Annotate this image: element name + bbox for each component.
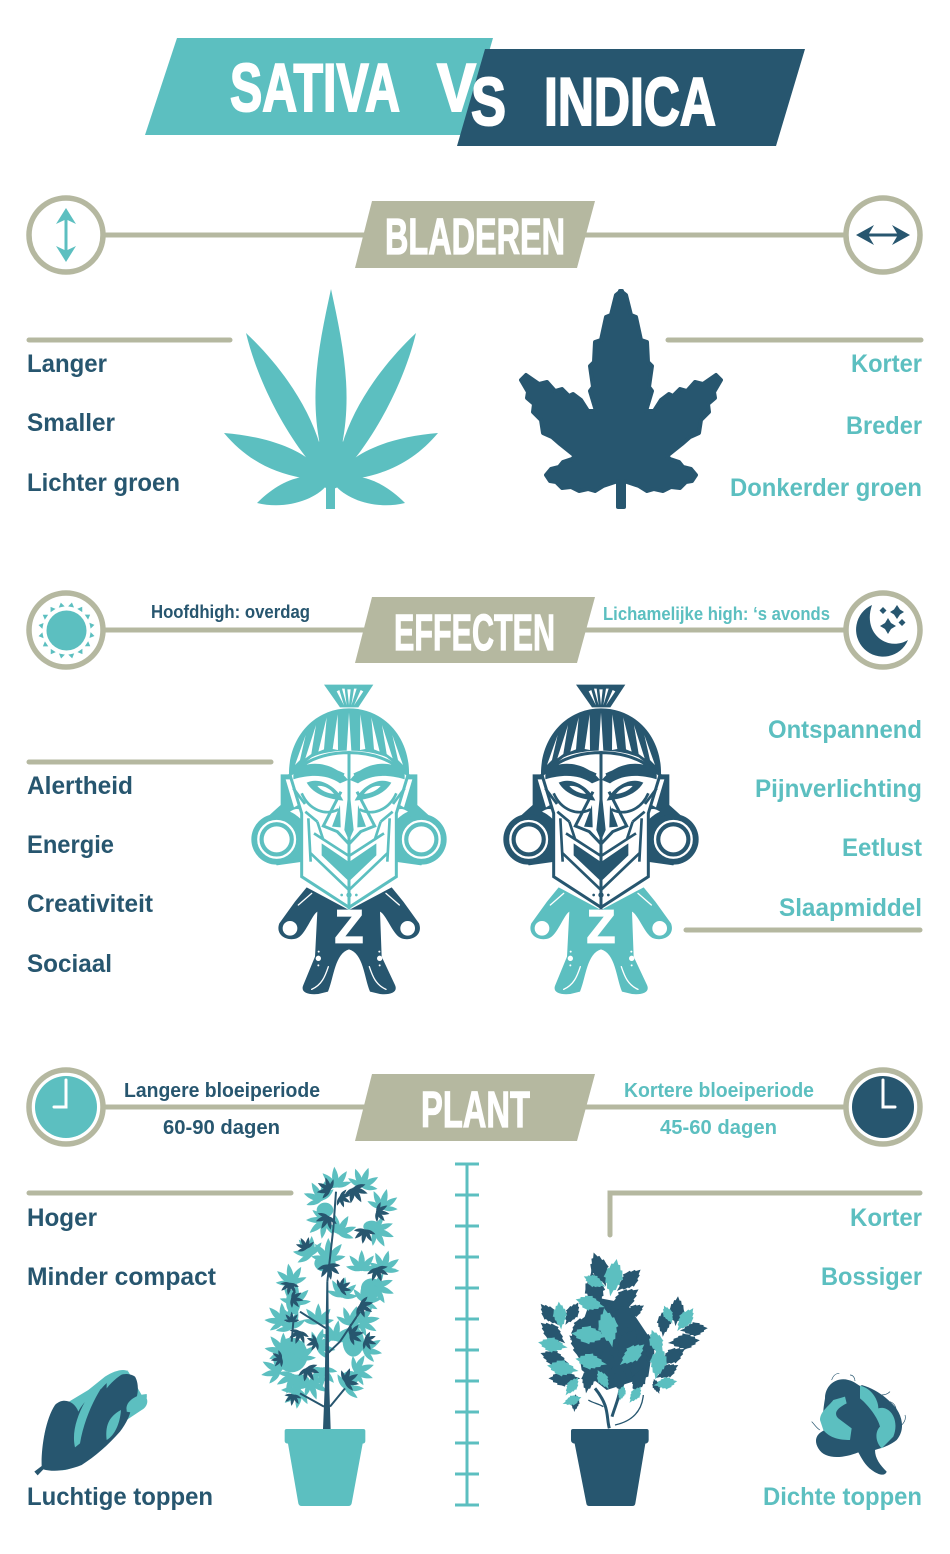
indica mask figure: Z (587, 901, 615, 953)
luchtige toppen label: Luchtige toppen (27, 1483, 213, 1511)
section heading: PLANT: PLANT (421, 1081, 530, 1138)
indica plant illustration (535, 1249, 708, 1506)
sativa leaf traits (27, 350, 180, 497)
icon: airy bud (34, 1370, 147, 1475)
heading: SATIVA: SATIVA (230, 50, 400, 126)
sativa leaf traits: Lichter groen (27, 469, 180, 497)
panel: plant (27, 1070, 922, 1511)
sativa flowering period: Langere bloeiperiode (124, 1080, 320, 1102)
indica effects list: Pijnverlichting (755, 775, 922, 803)
icon: indica clock (846, 1070, 920, 1144)
title banner (145, 38, 805, 146)
indica leaf traits: Breder (846, 412, 922, 440)
stem and branches (323, 1282, 331, 1429)
indica pot (571, 1429, 649, 1506)
sativa effects list (27, 772, 154, 978)
icon: vertical arrow (29, 198, 103, 272)
section heading: BLADEREN: BLADEREN (385, 208, 565, 265)
section heading: BLADEREN (355, 201, 595, 268)
indica leaf traits: Korter (851, 350, 922, 378)
icon: sativa clock (29, 1070, 103, 1144)
section heading: EFFECTEN: EFFECTEN (394, 604, 555, 661)
indica plant traits: Korter (850, 1204, 922, 1232)
indica ribbon (457, 49, 805, 146)
section heading: PLANT (355, 1074, 595, 1141)
indica flowering period: Kortere bloeiperiode (624, 1080, 814, 1102)
sativa leaf traits: Langer (27, 350, 107, 378)
heading: VS: V (437, 50, 476, 126)
icon: horizontal arrow (846, 198, 920, 272)
sativa effects list: Alertheid (27, 772, 133, 800)
teal foliage (255, 1162, 404, 1415)
indica plant traits: Bossiger (821, 1263, 922, 1291)
sativa plant traits: Minder compact (27, 1263, 217, 1291)
indica plant rule (610, 1193, 920, 1235)
sativa plant illustration (255, 1162, 404, 1506)
indica flowering period: 45-60 dagen (660, 1117, 777, 1139)
icon: sun (29, 593, 103, 667)
indica effects rule (686, 928, 920, 932)
indica leaf (521, 291, 721, 507)
sativa effects list: Sociaal (27, 950, 112, 978)
sativa plant rule (29, 1190, 291, 1196)
panel: effecten (27, 593, 923, 994)
section heading: EFFECTEN (355, 597, 595, 663)
leaves teal front (537, 1257, 699, 1409)
label: body high evening: Lichamelijke high: ‘s avonds (603, 603, 830, 624)
indica effects list: Eetlust (842, 834, 923, 862)
sativa effects list: Energie (27, 831, 114, 859)
label: head high daytime: Hoofdhigh: overdag (151, 601, 310, 622)
indica mask figure (503, 685, 699, 994)
indica leaf traits (730, 350, 922, 502)
indica flowering period (624, 1080, 814, 1139)
indica leaf rule (668, 338, 921, 342)
indica effects list: Slaapmiddel (779, 894, 922, 922)
icon: dense bud (812, 1373, 905, 1475)
leaves navy back (535, 1249, 708, 1412)
indica plant traits (821, 1204, 922, 1291)
indica leaf traits: Donkerder groen (730, 474, 922, 502)
sativa leaf rule (29, 338, 230, 342)
heading: INDICA: INDICA (544, 64, 716, 140)
sativa leaf (224, 289, 438, 509)
navy foliage (269, 1173, 392, 1407)
sativa flowering period (124, 1080, 320, 1139)
dichte toppen label: Dichte toppen (763, 1483, 922, 1511)
panel: bladeren (27, 198, 922, 509)
sativa mask figure: Z (335, 901, 363, 953)
sativa pot (285, 1429, 365, 1506)
sativa plant traits (27, 1204, 217, 1291)
sativa effects rule (29, 760, 271, 764)
sativa leaf traits: Smaller (27, 409, 115, 437)
sativa effects list: Creativiteit (27, 890, 154, 918)
indica effects list: Ontspannend (768, 716, 922, 744)
sativa mask figure (251, 685, 447, 994)
icon: moon and stars (846, 593, 920, 667)
heading: VS second letter: S (471, 64, 506, 140)
indica effects list (755, 716, 923, 922)
branches (595, 1388, 620, 1428)
sativa plant traits: Hoger (27, 1204, 97, 1232)
sativa ribbon (145, 38, 493, 135)
height ruler (455, 1164, 479, 1505)
sativa flowering period: 60-90 dagen (163, 1117, 280, 1139)
